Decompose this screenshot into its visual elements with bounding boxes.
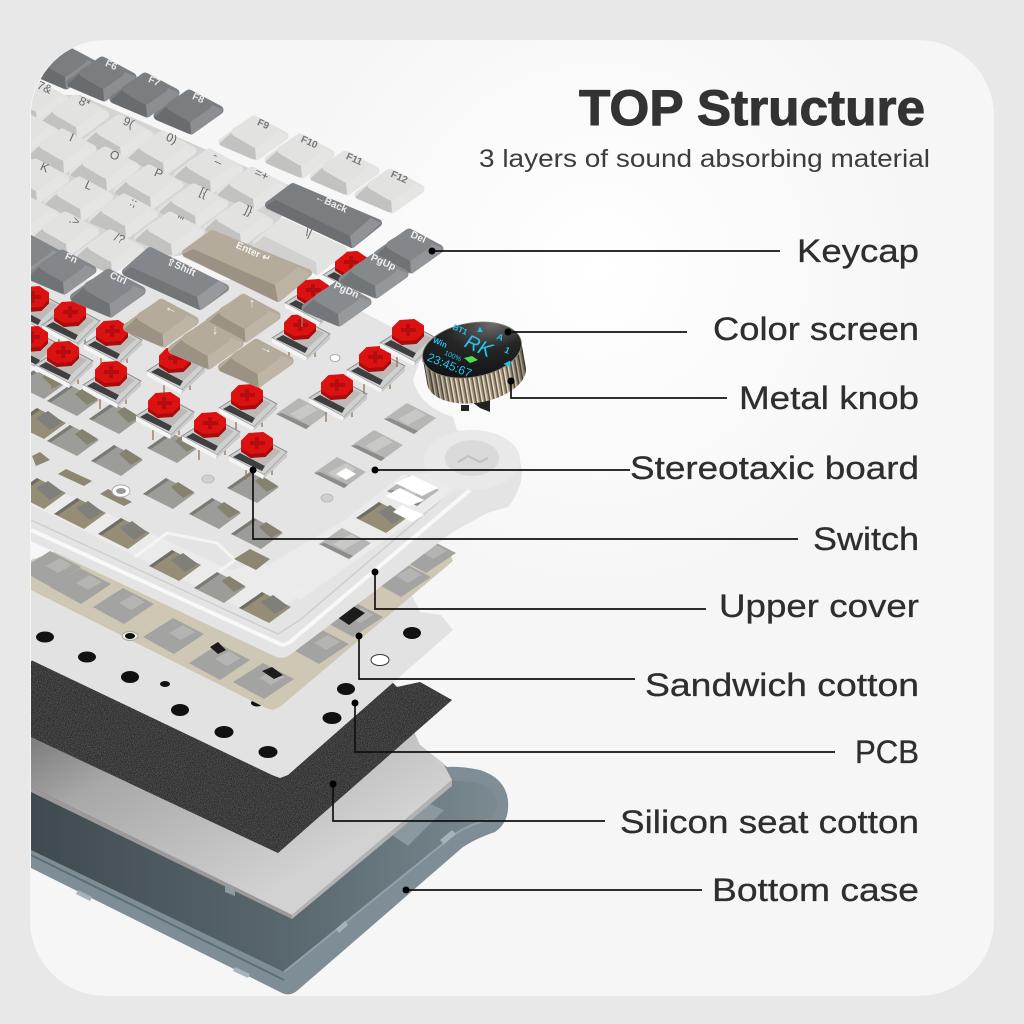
arrow keys: ↓ xyxy=(212,322,218,337)
light alphanumeric keys: .> xyxy=(67,212,82,229)
knob side xyxy=(418,315,530,411)
callout: PCB: PCB xyxy=(855,734,919,770)
light alphanumeric keys: O xyxy=(108,147,122,164)
light function keys xyxy=(220,117,423,212)
callout: PCB xyxy=(352,700,919,770)
layer: black foam xyxy=(31,660,452,853)
arrow keys xyxy=(124,295,292,386)
cotton windows xyxy=(20,537,456,699)
keycap: Enter: Enter ↵ xyxy=(234,240,272,265)
screen readouts: 100% xyxy=(443,350,462,363)
switch xyxy=(83,362,141,409)
partly hidden switch near PgDn xyxy=(284,279,329,327)
callout: Upper cover xyxy=(372,568,919,624)
callout: Metal knob xyxy=(508,378,919,416)
light alphanumeric keys: =+ xyxy=(252,165,271,184)
bottom row keys xyxy=(0,239,144,316)
callout: Bottom case: Bottom case xyxy=(712,872,919,908)
callout: Stereotaxic board: Stereotaxic board xyxy=(630,450,919,486)
keycap: PgDn: PgDn xyxy=(332,280,360,301)
callout: Switch xyxy=(250,466,919,557)
light alphanumeric keys: :; xyxy=(128,195,140,210)
subtitle: 3 layers of sound absorbing material xyxy=(479,145,930,173)
switch xyxy=(31,286,60,328)
switch xyxy=(84,321,142,368)
color screen xyxy=(418,315,526,385)
screen readouts: 1 xyxy=(503,345,512,356)
keycaps xyxy=(0,49,442,386)
title: TOP Structure xyxy=(579,80,925,136)
bottom row keys: Ctrl xyxy=(108,270,128,287)
keycap: PgDn xyxy=(303,280,370,326)
grey function keys: F8 xyxy=(190,91,206,106)
exploded keyboard illustration xyxy=(0,49,530,994)
narrow beige strips xyxy=(32,452,270,570)
arrow keys: ↑ xyxy=(249,295,255,310)
callout: Color screen xyxy=(504,311,919,347)
screen readouts: BT1 xyxy=(451,323,469,337)
light alphanumeric keys: ]} xyxy=(242,202,255,218)
callout: Switch: Switch xyxy=(813,521,919,557)
layer: stereotaxic board holes xyxy=(14,354,439,623)
PCB mounting holes xyxy=(36,627,421,758)
light alphanumeric keys: -_ xyxy=(211,148,227,165)
callout: Stereotaxic board xyxy=(372,450,919,486)
switch xyxy=(219,385,277,432)
switch xyxy=(182,413,240,460)
keyboard base under alpha keys xyxy=(31,95,300,262)
layer: PCB xyxy=(31,590,453,778)
callout: Sandwich cotton: Sandwich cotton xyxy=(645,667,919,703)
layer: sandwich cotton xyxy=(31,544,456,710)
keycap: Del: Del xyxy=(409,230,428,246)
callout: Keycap xyxy=(428,233,919,269)
light function keys: F12 xyxy=(389,169,410,186)
light alphanumeric keys: L xyxy=(83,178,95,193)
keycap: backslash: \| xyxy=(303,225,314,240)
screen readouts xyxy=(425,323,512,381)
light alphanumeric keys: '" xyxy=(174,213,185,228)
callout: Keycap: Keycap xyxy=(797,233,919,269)
keycap: Del xyxy=(375,230,442,272)
callout: Color screen: Color screen xyxy=(713,311,919,347)
grey function keys xyxy=(30,49,222,134)
light function keys: F9 xyxy=(255,117,271,132)
callout: Metal knob: Metal knob xyxy=(739,380,919,416)
light alphanumeric keys xyxy=(31,80,286,272)
light alphanumeric keys: 9( xyxy=(121,114,136,131)
light alphanumeric keys: I xyxy=(67,130,76,144)
keycap: Shift: ⇧Shift xyxy=(165,256,198,279)
light function keys: F10 xyxy=(299,134,320,151)
switch xyxy=(347,347,405,394)
light function keys: F11 xyxy=(344,151,364,168)
layer: bottom case xyxy=(31,745,508,994)
arrow keys: → xyxy=(258,338,276,357)
light alphanumeric keys: 0) xyxy=(164,130,179,147)
keycap: PgUp xyxy=(340,252,407,298)
hole with white slot xyxy=(314,457,366,488)
screen readouts: 23:45:67 xyxy=(425,350,474,381)
keycap: Back: ←Back xyxy=(313,192,349,216)
screen readouts: RK xyxy=(461,331,497,363)
callout: Silicon seat cotton: Silicon seat cotton xyxy=(620,804,919,840)
keycap: Back xyxy=(266,187,381,248)
switch xyxy=(309,375,367,422)
callout: Silicon seat cotton xyxy=(330,780,919,840)
bottom row keys: Fn xyxy=(63,251,79,266)
callout: Bottom case xyxy=(402,872,919,908)
arrow keys: ← xyxy=(163,298,181,317)
light alphanumeric keys: 7& xyxy=(35,78,54,97)
callout: Upper cover: Upper cover xyxy=(719,588,919,624)
switch xyxy=(380,320,438,367)
grey function keys: F7 xyxy=(146,74,162,89)
grey function keys: F6 xyxy=(103,58,119,73)
keycap: Shift xyxy=(123,251,228,310)
keycap: backslash xyxy=(254,222,343,275)
layer: upper cover xyxy=(31,280,522,658)
screen readouts: A xyxy=(495,331,506,343)
switch xyxy=(42,302,100,349)
switch xyxy=(136,393,194,440)
battery bar xyxy=(464,356,478,363)
keycap: PgUp: PgUp xyxy=(369,252,397,273)
keycap: Enter xyxy=(183,234,311,302)
screen readouts: ▲ xyxy=(476,324,484,334)
screen readouts: Win xyxy=(432,336,449,350)
light alphanumeric keys: P xyxy=(152,165,165,181)
layer: silicon seat cotton xyxy=(31,733,452,919)
hole with white slots xyxy=(385,475,439,522)
switch xyxy=(147,348,205,395)
screen readouts: ◀ xyxy=(503,359,511,368)
light alphanumeric keys: /? xyxy=(112,230,127,247)
knob base tabs xyxy=(461,400,490,412)
switch xyxy=(35,342,93,389)
knob mounting boss xyxy=(445,430,520,490)
switch xyxy=(229,433,287,480)
switches xyxy=(4,252,438,480)
color screen metal knob xyxy=(418,315,530,412)
partly hidden switch near PgUp xyxy=(322,251,367,294)
light alphanumeric keys: [{ xyxy=(197,184,210,200)
light alphanumeric keys: K xyxy=(38,159,51,175)
light alphanumeric keys: 8* xyxy=(77,94,93,111)
switch xyxy=(272,315,330,362)
callout: Sandwich cotton xyxy=(356,632,919,703)
switch xyxy=(31,326,56,373)
